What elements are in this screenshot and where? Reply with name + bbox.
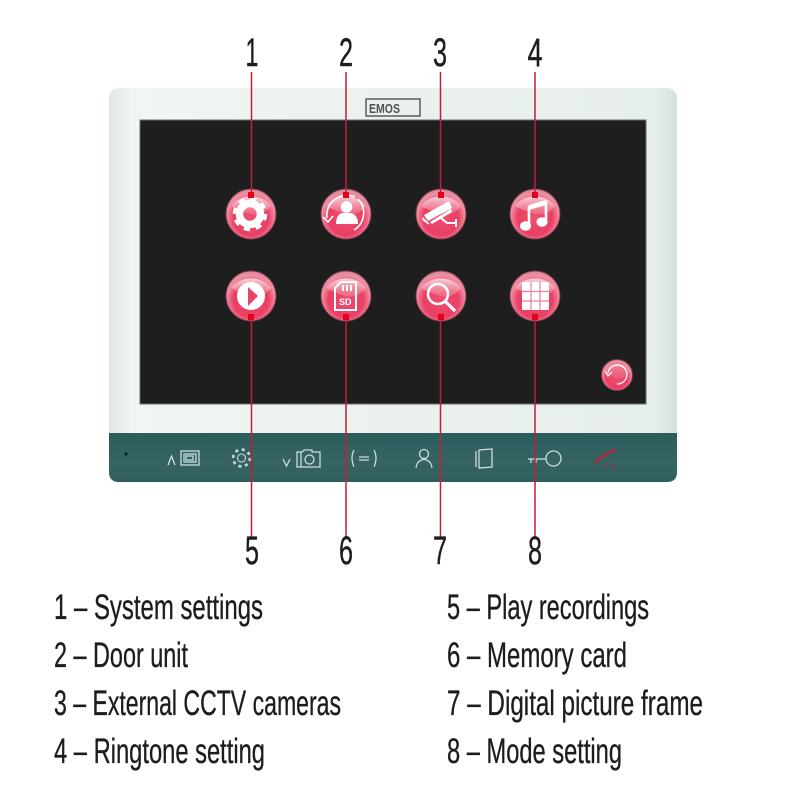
legend: right column: 8 – Mode setting: [447, 732, 622, 771]
legend: left column: 4 – Ringtone setting: [54, 732, 265, 771]
monitor: [109, 88, 677, 482]
icon: door: [476, 449, 492, 468]
callout numbers: 3: [433, 31, 447, 75]
callout numbers: 8: [528, 529, 542, 573]
button 7: magnifier: [416, 271, 466, 321]
callout numbers: 1: [246, 31, 258, 75]
control bar: [109, 433, 677, 482]
logo: EMOS: [366, 99, 420, 116]
callout numbers: 7: [433, 529, 447, 573]
callout numbers: 2: [339, 31, 353, 75]
button 8: grid mode: [510, 271, 560, 321]
monitor frame: [109, 88, 677, 482]
icon: key: [528, 451, 561, 466]
legend: right column: [447, 588, 703, 771]
callout numbers: [245, 31, 542, 573]
button 2: door unit person: [321, 189, 371, 239]
icon: gear outline: [234, 450, 250, 466]
icon: up arrow and video: [168, 451, 199, 465]
logo: EMOS: EMOS: [369, 101, 400, 116]
icon: down arrow and camera: [283, 450, 320, 467]
button 4: ringtone music note: [510, 189, 560, 239]
button: back (small): [602, 360, 632, 390]
callout numbers: 4: [528, 31, 542, 75]
callout markers: [248, 192, 538, 320]
icon: hang up handset: [596, 450, 615, 468]
legend: right column: 5 – Play recordings: [447, 588, 649, 627]
button 3: CCTV camera: [416, 189, 466, 239]
callout numbers: 5: [245, 529, 259, 573]
legend: left column: 3 – External CCTV cameras: [54, 684, 341, 723]
legend: left column: 2 – Door unit: [54, 636, 188, 675]
button 1: settings gear: [226, 189, 276, 239]
legend: right column: 6 – Memory card: [447, 636, 627, 675]
icon: intercom swap: [352, 450, 376, 467]
button 6: SD memory card: [321, 271, 371, 321]
status LED: [124, 452, 128, 456]
legend: left column: 1 – System settings: [54, 588, 263, 627]
callout numbers: 6: [339, 529, 353, 573]
callout lines: [252, 72, 535, 538]
legend: left column: [54, 588, 341, 771]
button 5: play recordings: [226, 271, 276, 321]
screen: [140, 120, 646, 404]
button 6: SD memory card: SD: [339, 297, 352, 307]
icon: person: [416, 450, 432, 468]
